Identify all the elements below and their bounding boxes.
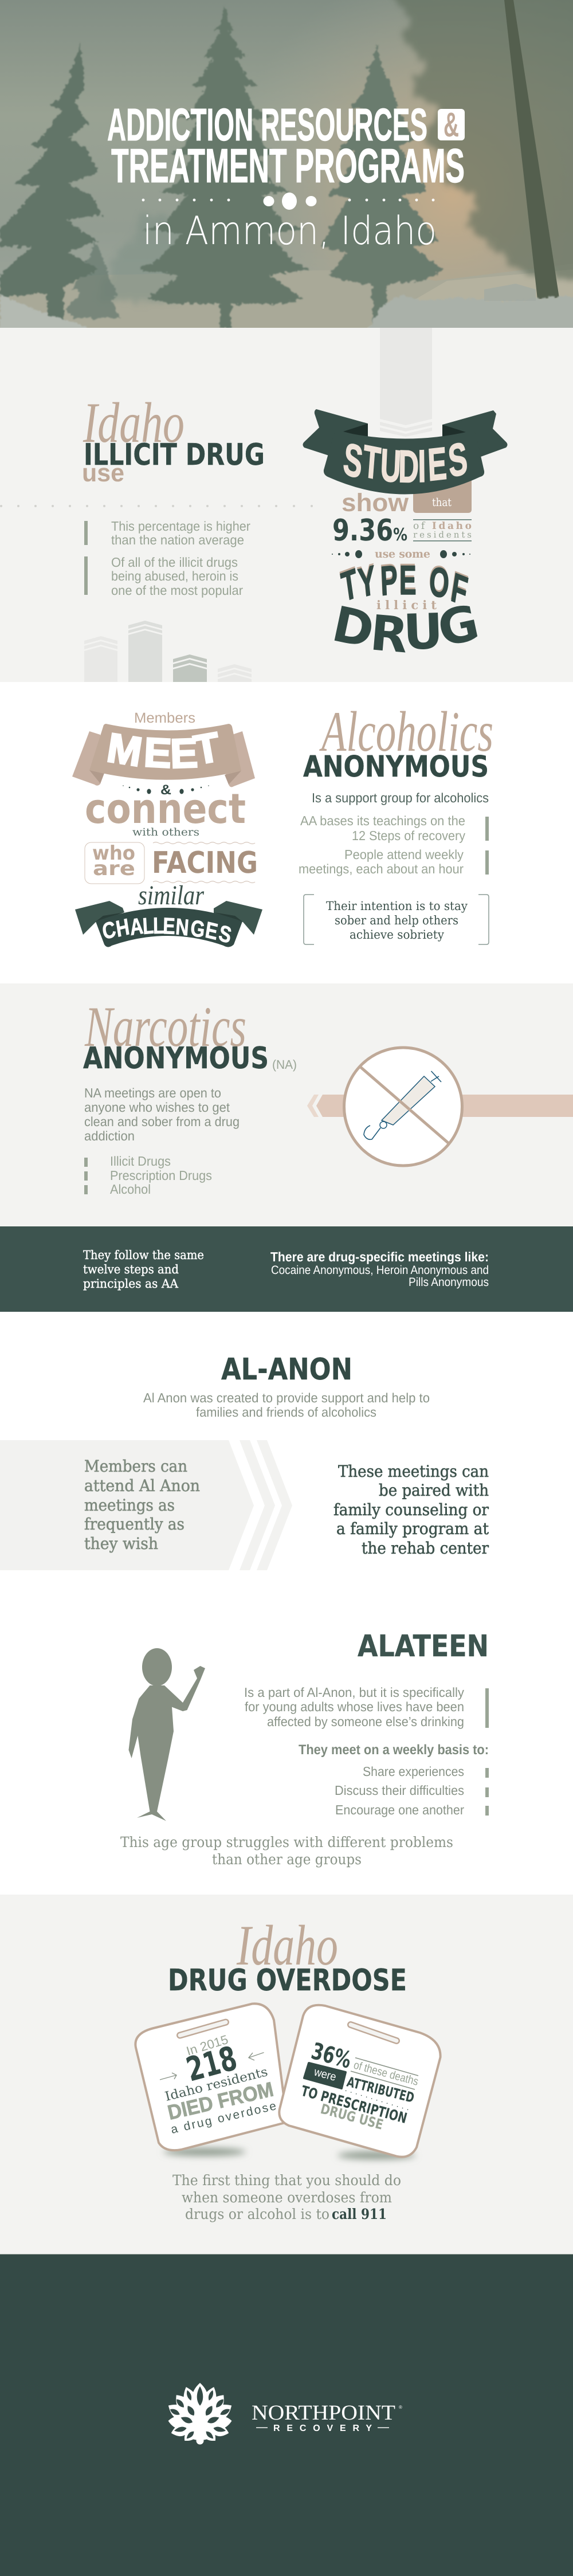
text block: heroin popular: Of all of the illicit drugs	[111, 555, 238, 570]
text block: NA meetings: addiction	[84, 1128, 135, 1143]
heading: Idaho drug overdose: Idaho	[236, 1914, 338, 1977]
text block: attend as frequently: attend Al Anon	[84, 1476, 200, 1495]
stat: 9.36% of Idaho residents: 9.36%	[332, 513, 407, 548]
panel: Al-Anon	[0, 1312, 573, 1580]
panel: footer	[0, 2254, 573, 2576]
text block: 12 steps: 12 Steps of recovery	[352, 828, 465, 843]
heading: Narcotics Anonymous: (NA)	[272, 1057, 297, 1072]
list: weekly activities: Encourage one another	[335, 1802, 464, 1817]
heading: Alateen: ALATEEN	[358, 1629, 489, 1664]
text: twelve steps: principles as AA	[83, 1277, 179, 1291]
text block: family counseling: a family program at	[336, 1519, 489, 1538]
text: twelve steps	[83, 1248, 204, 1291]
card: 218 residents: 218	[182, 2038, 241, 2089]
text block: family counseling	[333, 1462, 489, 1558]
ampersand with dots	[123, 782, 209, 798]
text block: family counseling: These meetings can	[338, 1462, 489, 1481]
title	[107, 99, 465, 193]
panel: Idaho illicit drug use	[0, 328, 573, 682]
heading: Alcoholics Anonymous	[303, 700, 493, 784]
ribbon: challenges	[75, 901, 262, 948]
stat: 9.36% of Idaho residents: of Idaho	[413, 520, 472, 532]
ampersand badge: &	[444, 105, 459, 144]
list: substances: Alcohol	[110, 1182, 151, 1197]
heading: Narcotics Anonymous: ANONYMOUS	[83, 1041, 269, 1076]
card: 218 residents: Idaho residents	[163, 2065, 269, 2104]
text block: Al-Anon intro	[143, 1390, 430, 1420]
text block: NA meetings	[84, 1085, 240, 1143]
text block: heroin popular: one of the most popular	[111, 583, 243, 598]
icon: crossed-out syringe	[344, 1048, 462, 1166]
text: twelve steps: twelve steps and	[83, 1262, 179, 1276]
text block: weekly meetings: People attend weekly	[344, 847, 464, 862]
text block: percentage higher: This percentage is higher	[111, 519, 250, 534]
card: 36% prescription: were	[312, 2065, 337, 2084]
ribbon: challenges: CHALLENGES	[100, 913, 233, 948]
wordmark: ®	[399, 2405, 402, 2410]
hero background: misty pine forest photo	[0, 0, 573, 334]
heading: Idaho illicit drug use: ILLICIT DRUG	[84, 438, 265, 472]
lettering: members meet and connect: FACING	[152, 846, 258, 880]
card: 218 residents: a drug overdose	[170, 2099, 277, 2136]
text block: call 911: drugs or alcohol is to	[185, 2206, 329, 2222]
text block: attend as frequently	[84, 1457, 200, 1553]
text: type of: TYPE OF	[339, 557, 470, 615]
ampersand with dots: &	[160, 782, 171, 798]
text: support group: Is a support group for alcoholics	[312, 790, 489, 805]
text block: NA meetings: clean and sober from a drug	[84, 1114, 240, 1129]
list: weekly activities	[335, 1764, 489, 1817]
panel: Narcotics Anonymous	[0, 983, 573, 1226]
text block: percentage higher: than the nation average	[111, 532, 244, 547]
heading: Alcoholics Anonymous: ANONYMOUS	[303, 750, 489, 784]
text block: weekly meetings: meetings, each about an hour	[299, 861, 464, 876]
callout: intention: Their intention is to stay	[326, 899, 468, 913]
text block: different problems: than other age groups	[212, 1851, 362, 1868]
text: illicit: illicit	[376, 598, 437, 612]
text block: different problems	[120, 1834, 453, 1868]
text block: heroin popular: being abused, heroin is	[111, 568, 238, 583]
stat: 9.36% of Idaho residents: residents	[413, 530, 472, 540]
text block: part of Al-Anon: for young adults whose lives have been	[245, 1699, 464, 1714]
panel: dark band	[0, 1226, 573, 1312]
icon: waving person	[128, 1648, 205, 1821]
lettering: members meet and connect: similar	[138, 880, 204, 911]
card: 36% prescription	[279, 2005, 441, 2157]
card: 36% prescription: of these deaths	[352, 2059, 419, 2088]
text: show: show	[342, 489, 409, 517]
ribbon: meet	[72, 724, 255, 787]
card: 218 residents	[135, 2003, 287, 2150]
list: substances: Prescription Drugs	[110, 1168, 212, 1183]
text block: attend as frequently: Members can	[84, 1457, 187, 1476]
heading: Narcotics Anonymous: Narcotics	[84, 995, 246, 1058]
text block: family counseling: family counseling or	[333, 1500, 489, 1519]
icon: peacock feather mark: ®	[227, 2421, 230, 2425]
wordmark: RECOVERY	[273, 2424, 372, 2433]
card: 36% prescription: DRUG USE	[319, 2101, 385, 2133]
lettering: members meet and connect: with others	[132, 826, 199, 838]
text: weekly basis: They meet on a weekly basis to:	[299, 1742, 489, 1758]
ampersand badge	[438, 105, 465, 144]
text block: weekly meetings	[299, 847, 489, 876]
card: 36% prescription: 36%	[308, 2038, 354, 2074]
wordmark: NORTHPOINT	[252, 2401, 395, 2425]
panel: Alateen	[0, 1580, 573, 1895]
callout: intention: achieve sobriety	[350, 928, 444, 942]
text: drug: DRUG	[328, 594, 484, 665]
text block: call 911: when someone overdoses from	[182, 2189, 392, 2206]
heading: Idaho drug overdose	[168, 1914, 407, 1998]
card: 36% prescription: TO PRESCRIPTION	[299, 2083, 409, 2127]
subtitle: in Ammon, Idaho	[143, 209, 437, 254]
lettering: members meet and connect: connect	[85, 785, 246, 833]
panel: hero	[0, 0, 573, 334]
callout: intention	[304, 895, 489, 944]
text block: call 911	[172, 2172, 401, 2222]
text: drug-specific meetings	[270, 1249, 489, 1289]
text block: NA meetings: NA meetings are open to	[84, 1085, 221, 1100]
text: use some, with dots: use some	[375, 548, 430, 560]
text block: 12 steps	[300, 813, 489, 843]
list: substances: Illicit Drugs	[110, 1154, 171, 1169]
chevron panel	[0, 1440, 292, 1570]
text block: percentage higher	[84, 519, 250, 547]
ribbon: studies	[303, 409, 508, 494]
chevron column chart	[84, 621, 252, 682]
text block: 12 steps: AA bases its teachings on the	[300, 813, 465, 828]
box: who are: who	[92, 842, 135, 865]
decorative dots and flowers	[142, 193, 434, 210]
heading: Alcoholics Anonymous: Alcoholics	[319, 700, 493, 763]
text: twelve steps: They follow the same	[83, 1248, 204, 1262]
wordmark	[252, 2401, 402, 2433]
tan box behind ribbon with "that": that	[432, 496, 452, 509]
text block: part of Al-Anon	[244, 1685, 489, 1729]
text block: Al-Anon intro: families and friends of alcoholics	[196, 1405, 376, 1420]
lettering: members meet and connect	[72, 710, 262, 948]
stat: 9.36% of Idaho residents	[332, 513, 472, 548]
text block: family counseling: the rehab center	[362, 1539, 489, 1558]
card: 218 residents: In 2015	[185, 2032, 230, 2059]
tan box behind ribbon with "that"	[413, 476, 472, 513]
heading: Al-Anon: AL-ANON	[221, 1352, 352, 1387]
box: who are: are	[93, 857, 135, 880]
heading: Idaho drug overdose: DRUG OVERDOSE	[168, 1963, 407, 1998]
text block: Al-Anon intro: Al Anon was created to provide support and help to	[143, 1390, 430, 1405]
text block: attend as frequently: meetings as	[84, 1496, 175, 1515]
card: 218 residents: DIED FROM	[166, 2077, 276, 2124]
heading: Idaho illicit drug use: use	[82, 459, 124, 487]
text: drug-specific meetings: Pills Anonymous	[409, 1276, 489, 1289]
dotted divider	[0, 505, 313, 507]
list: weekly activities: Discuss their difficulties	[335, 1783, 464, 1798]
panel: Idaho drug overdose	[0, 1895, 573, 2255]
heading: Idaho illicit drug use	[82, 391, 265, 487]
text: drug-specific meetings: There are drug-specific meetings like:	[270, 1249, 489, 1264]
text block: NA meetings: anyone who wishes to get	[84, 1100, 230, 1115]
text block: call 911: call 911	[332, 2206, 387, 2222]
card shadows	[163, 2148, 415, 2159]
text block: attend as frequently: they wish	[84, 1534, 158, 1553]
text block: attend as frequently: frequently as	[84, 1515, 185, 1534]
text block: part of Al-Anon: Is a part of Al-Anon, but it is specifically	[244, 1685, 464, 1700]
text block: heroin popular	[84, 555, 243, 598]
text: use some, with dots	[332, 548, 470, 560]
arrow band	[307, 1095, 573, 1117]
hanging ribbon with chevrons	[380, 328, 432, 437]
text block: different problems: This age group struggles with different problems	[120, 1834, 453, 1850]
panel: Alcoholics Anonymous	[0, 682, 573, 983]
box: who are	[85, 842, 144, 884]
heading: Idaho illicit drug use: Idaho	[83, 391, 185, 454]
ribbon: studies: STUDIES	[341, 432, 469, 492]
text block: part of Al-Anon: affected by someone else’s drinking	[267, 1714, 464, 1729]
text: drug-specific meetings: Cocaine Anonymous, Heroin Anonymous and	[271, 1264, 489, 1277]
list: weekly activities: Share experiences	[363, 1764, 464, 1779]
logo: Northpoint Recovery	[165, 2383, 402, 2445]
ribbon: meet: MEET	[104, 724, 223, 777]
icon: peacock feather mark	[165, 2383, 235, 2445]
card: 36% prescription: ATTRIBUTED	[346, 2074, 416, 2106]
callout: intention: sober and help others	[335, 913, 458, 927]
list: substances	[84, 1154, 212, 1197]
lettering: members meet and connect: Members	[134, 710, 195, 726]
text block: call 911: The first thing that you should do	[172, 2172, 401, 2189]
text block: family counseling: be paired with	[379, 1481, 489, 1500]
